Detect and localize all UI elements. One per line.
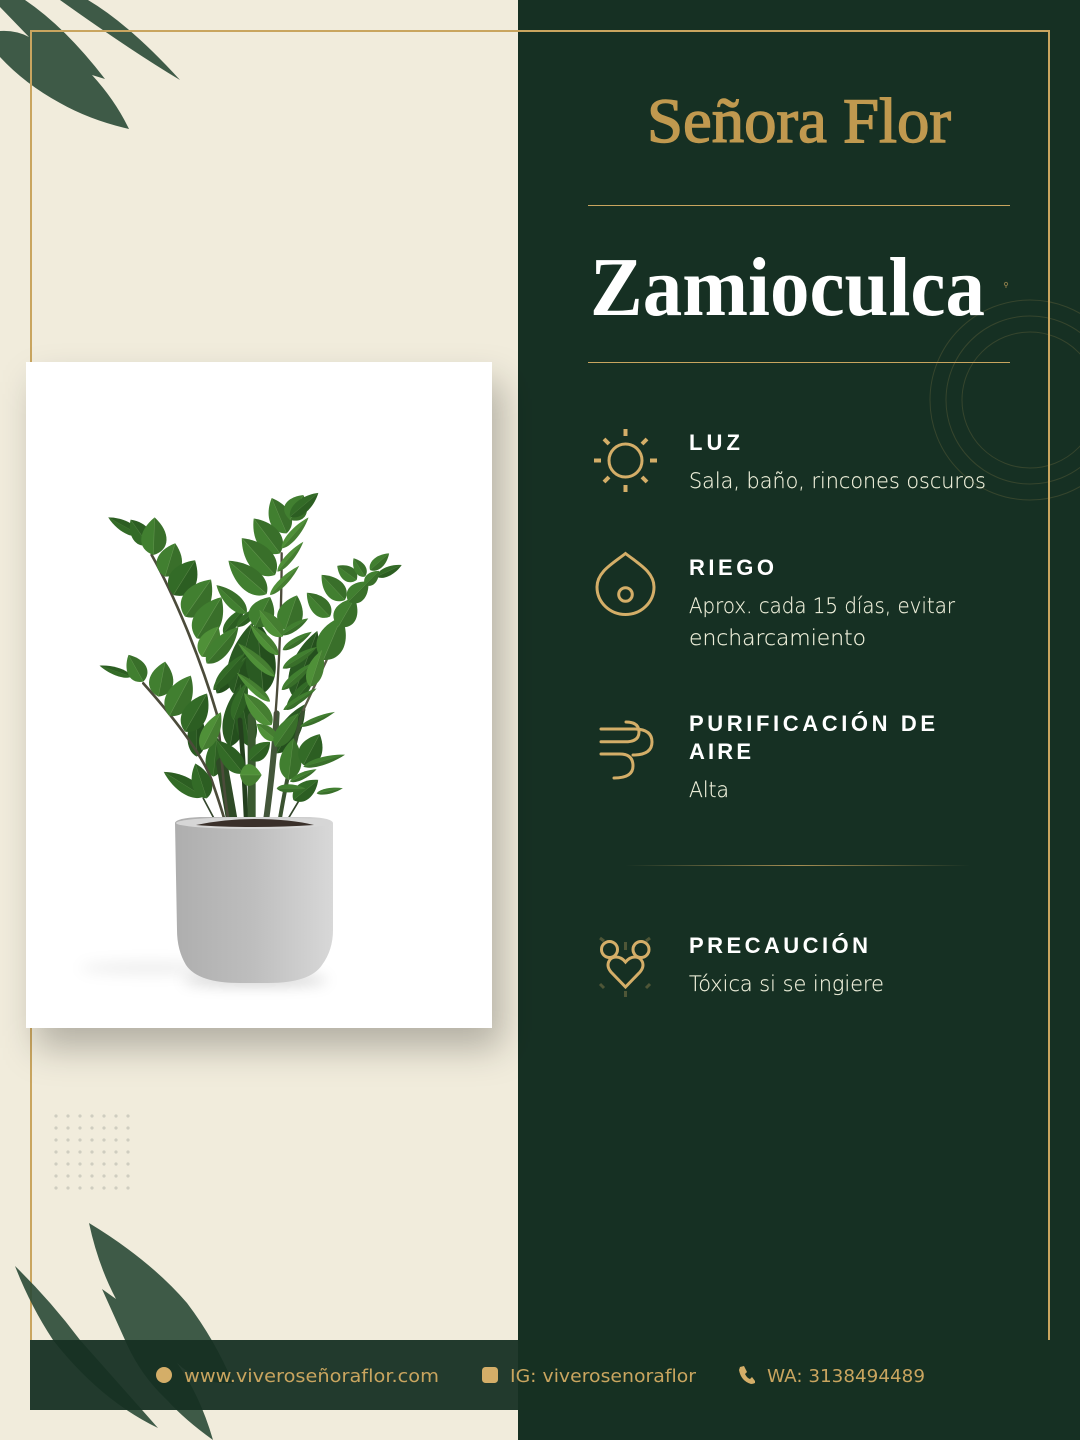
footer: instagram: IG: viverosenoraflor	[510, 1366, 697, 1387]
center branch leaves	[211, 488, 323, 786]
item: luz	[689, 430, 986, 494]
icon: water drop	[597, 554, 654, 614]
icon: wind	[601, 722, 652, 778]
item: precaucion: PRECAUCIÓN	[689, 933, 868, 958]
item: purificacion de aire: Alta	[689, 778, 729, 803]
item: precaucion	[689, 933, 884, 997]
dense back foliage	[187, 604, 329, 777]
item: riego: Aprox. cada 15 días, evitar	[689, 594, 955, 619]
item: purificacion de aire	[689, 711, 935, 803]
panel: cream background	[0, 0, 518, 1440]
item: riego: encharcamiento	[689, 626, 866, 651]
plant name: Zamioculca	[590, 241, 985, 334]
photo card	[26, 362, 492, 1028]
footer: website: www.viveroseñoraflor.com	[184, 1366, 439, 1387]
right branch leaves	[277, 549, 404, 807]
photo card shadow	[36, 382, 502, 1048]
item: riego: RIEGO	[689, 555, 774, 580]
footer: whatsapp: WA: 3138494489	[767, 1366, 925, 1387]
icon: heart caution	[600, 938, 650, 997]
stems	[143, 553, 327, 828]
leaves: bottom left corner	[15, 1223, 233, 1440]
pot	[175, 817, 333, 983]
footer bar	[30, 1340, 1050, 1410]
item: purificacion de aire: PURIFICACIÓN DE	[689, 711, 935, 736]
item: precaucion: Tóxica si se ingiere	[689, 972, 884, 997]
divider fading	[625, 865, 970, 866]
icon: sun	[594, 429, 657, 492]
panel: dark green background	[518, 0, 1080, 1440]
divider top	[588, 205, 1010, 206]
divider bottom	[588, 362, 1010, 363]
brand title: Señora Flor	[647, 85, 951, 156]
item: luz: LUZ	[689, 430, 740, 455]
item: purificacion de aire: AIRE	[689, 739, 751, 764]
decorative dot grid	[54, 1114, 130, 1190]
left branch leaves	[98, 512, 251, 803]
illustration: potted zamioculca plant	[80, 488, 404, 985]
item: riego	[689, 555, 955, 651]
leaves: top left corner	[0, 0, 180, 129]
small pin ornament	[1004, 282, 1008, 288]
decorative concentric circles	[930, 300, 1080, 500]
item: luz: Sala, baño, rincones oscuros	[689, 469, 986, 494]
